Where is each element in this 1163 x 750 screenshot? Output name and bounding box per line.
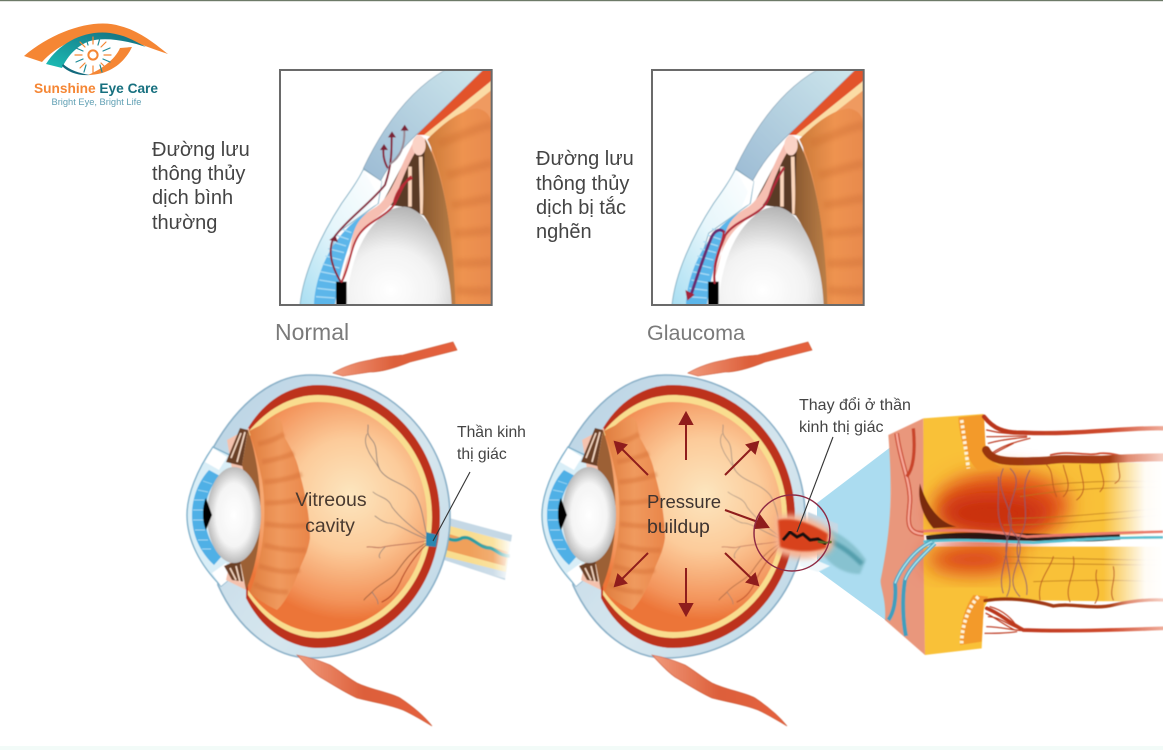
damaged optic nerve head [776,515,834,558]
damaged optic nerve tail [800,512,866,574]
outer vessels and roots [984,417,1163,633]
heading: Glaucoma: Glaucoma [647,321,745,345]
illustration: normal eye cross-section [187,342,526,726]
illustration: glaucoma eye cross-section: buildup [647,516,710,538]
fade to white [1103,460,1163,607]
text: blocked drainage label: thông thủy [536,173,629,195]
normal flow arrows [331,129,412,282]
illustration: glaucoma eye cross-section [542,342,911,726]
panel: glaucoma blocked drainage close-up [652,70,864,305]
pink tissue wall [881,418,925,655]
label: vitreous cavity: Vitreous [295,489,367,511]
illustration: magnified optic nerve damage [881,414,1163,655]
lamina cribrosa mesh [998,468,1030,597]
illustration: glaucoma eye cross-section: kinh thị giác [799,419,884,436]
text: normal drainage label: Đường lưu [152,139,250,161]
eyeball [187,342,457,726]
panel: normal aqueous drainage close-up [280,70,492,305]
eyeball [542,342,812,726]
optic nerve [432,515,512,580]
label: optic nerve change: Thay đổi ở thần [799,396,911,414]
label: pressure buildup: Pressure [647,491,721,512]
magnifier circle [754,495,830,571]
label: optic nerve: Thần kinh [457,424,526,441]
upper artery pair [897,433,923,534]
text: normal drainage label: dịch bình [152,187,233,209]
heading: Normal: Normal [275,319,349,345]
nerve fibres [1003,481,1163,582]
retinal capillaries [1039,463,1120,603]
teal veins [888,542,932,620]
top edge strip [0,0,1163,1]
logo: Sunshine Eye Care [24,24,168,107]
text: normal drainage label: thường [152,212,217,234]
text: blocked drainage label: dịch bị tắc [536,196,626,219]
logo icon: eye with sun [24,24,168,75]
leader line [797,437,833,532]
text: blocked drainage label: Đường lưu [536,148,634,170]
text: blocked drainage label: nghẽn [536,221,592,243]
bottom edge tint [0,746,1163,750]
retinal bundle bands [985,450,1163,607]
pressure arrows [615,413,768,615]
heat zones [937,472,1070,538]
yellow nerve tissue upper [923,414,1163,535]
text: normal drainage label: thông thủy [152,163,245,185]
central retinal vessels [927,536,1120,539]
yellow nerve tissue lower [923,547,1163,655]
blocked flow arrow [691,168,784,296]
illustration: normal eye cross-section: thị giác [457,446,507,463]
orange photoreceptor strips [958,415,1000,472]
logo tagline: Bright Eye, Bright Life [52,97,141,107]
leader line [433,472,470,541]
logo name: Sunshine Eye Care [34,81,158,96]
magnification cone [817,446,892,622]
illustration: normal eye cross-section: cavity [305,515,355,537]
